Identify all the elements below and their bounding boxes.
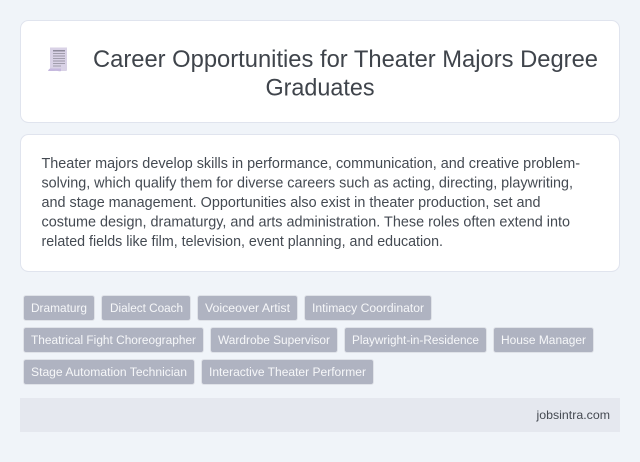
tag: Theatrical Fight Choreographer (24, 328, 204, 352)
tag: Wardrobe Supervisor: Wardrobe Supervisor (218, 333, 330, 347)
panel: header (20, 20, 620, 122)
tag: House Manager (494, 328, 594, 352)
panel: description (20, 134, 620, 272)
tag: Stage Automation Technician (24, 360, 194, 384)
tag: Voiceover Artist (198, 296, 298, 320)
tag: Dramaturg (24, 296, 94, 320)
text block: description (42, 156, 580, 250)
text block: description: costume design, dramaturgy, and arts administration. These roles often extend into (42, 215, 570, 231)
tag: Dialect Coach (102, 296, 190, 320)
tags (24, 296, 594, 384)
text block: description: Theater majors develop skills in performance, communication, and creative problem- (42, 156, 580, 172)
tag: Intimacy Coordinator: Intimacy Coordinator (312, 301, 424, 315)
footer (20, 398, 620, 432)
icon: document scroll (48, 48, 67, 71)
tag: House Manager: House Manager (501, 333, 586, 347)
tag: Interactive Theater Performer (202, 360, 374, 384)
tag: Theatrical Fight Choreographer: Theatrical Fight Choreographer (31, 333, 196, 347)
footer: source: jobsintra.com (535, 408, 610, 422)
tag: Playwright-in-Residence (344, 328, 486, 352)
title: Graduates (266, 75, 374, 102)
text block: description: solving, which qualify them for diverse careers such as acting, directing, playwriting, (42, 176, 573, 192)
title (93, 46, 598, 102)
tag: Stage Automation Technician: Stage Automation Technician (31, 365, 187, 379)
tag: Voiceover Artist: Voiceover Artist (205, 301, 291, 315)
tag: Dialect Coach: Dialect Coach (110, 301, 183, 315)
tag: Intimacy Coordinator (304, 296, 432, 320)
tag: Interactive Theater Performer: Interactive Theater Performer (209, 365, 366, 379)
text block: description: related fields like film, television, event planning, and education. (42, 234, 443, 250)
tag: Dramaturg: Dramaturg (31, 301, 87, 315)
text block: description: and stage management. Opportunities also exist in theater production, set and (42, 195, 540, 211)
tag: Wardrobe Supervisor (210, 328, 338, 352)
title: Career Opportunities for Theater Majors Degree (93, 46, 598, 73)
tag: Playwright-in-Residence: Playwright-in-Residence (352, 333, 479, 347)
